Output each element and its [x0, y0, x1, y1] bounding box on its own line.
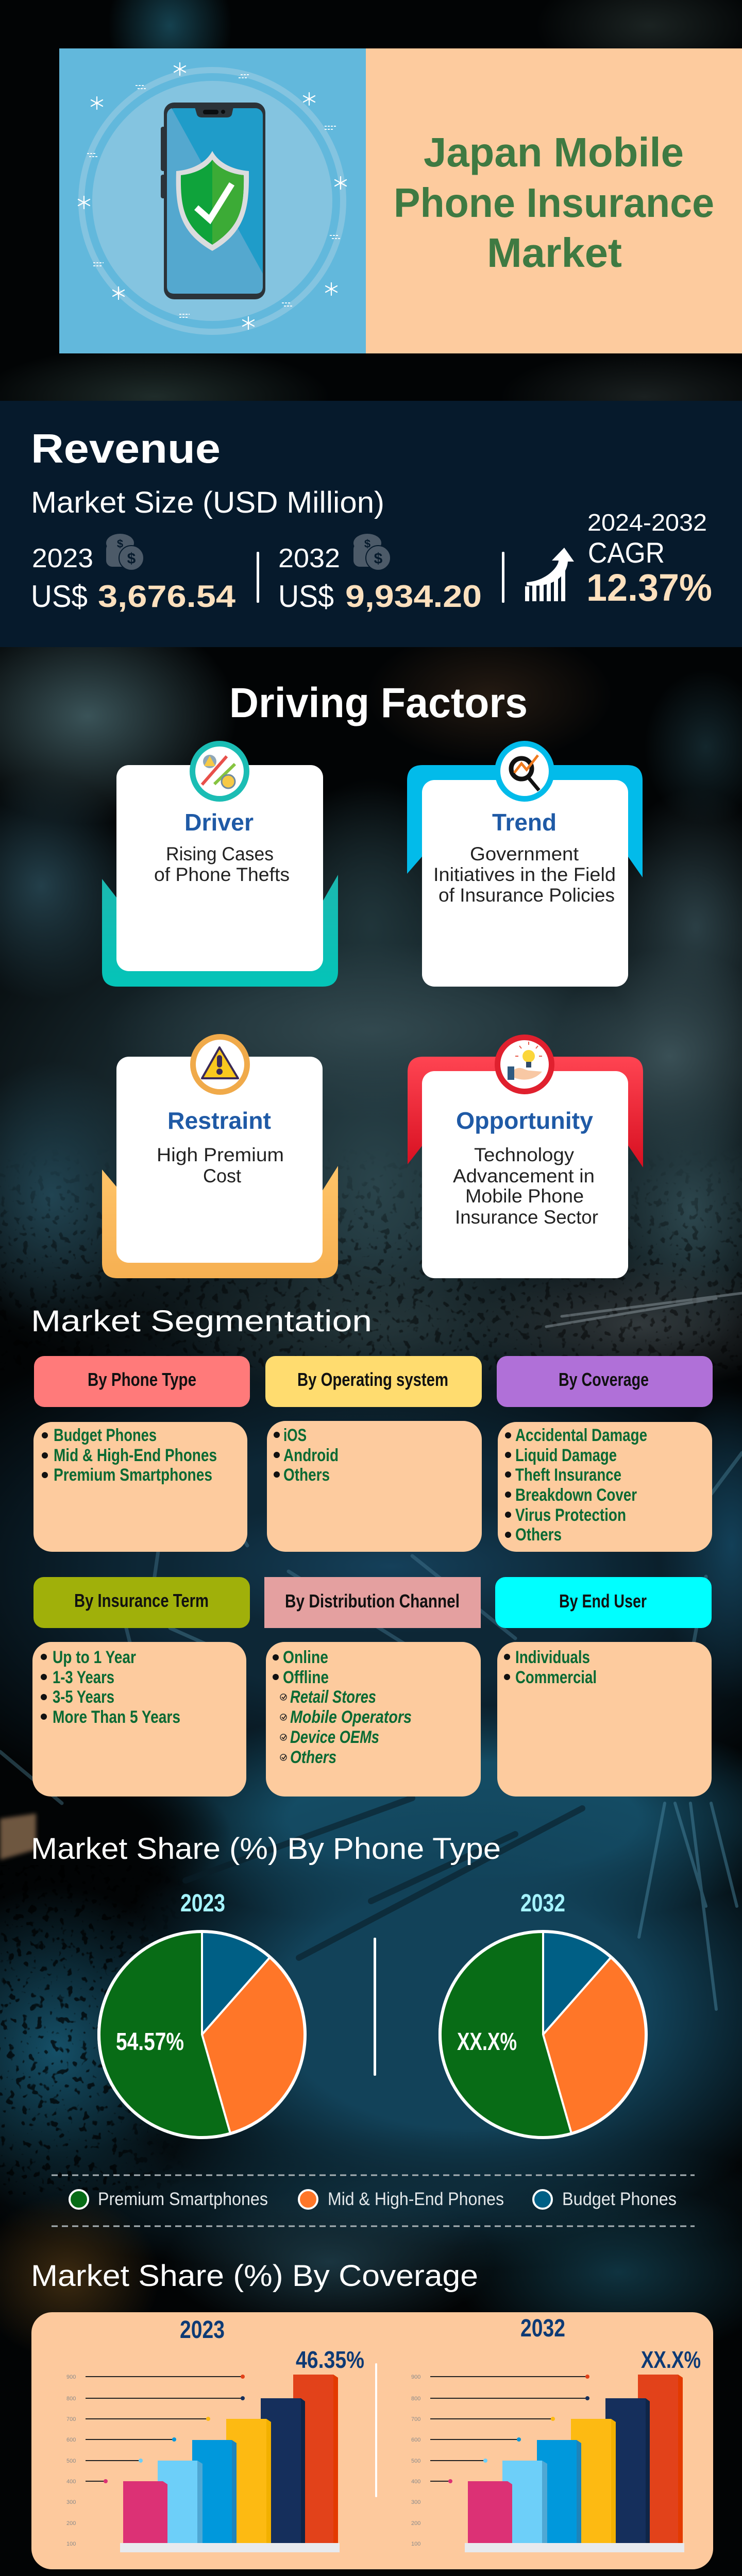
heading: market segmentation: Market Segmentation	[31, 1304, 372, 1338]
segment: by insurance term: By Insurance Term	[74, 1590, 209, 1611]
bar chart 2032: 900	[411, 2374, 420, 2380]
icon: sparkles	[78, 63, 346, 329]
icon: small dashes	[87, 75, 341, 317]
bar chart 2032: 300	[411, 2499, 420, 2505]
icon: trend	[495, 741, 554, 802]
stat: CAGR: 2024-2032	[587, 509, 707, 536]
list: end users	[504, 1648, 597, 1687]
bar chart 2023: 800	[66, 2396, 76, 2402]
list: coverage types: Theft Insurance	[515, 1465, 621, 1485]
title panel	[366, 48, 742, 353]
segment: by coverage: By Coverage	[559, 1369, 649, 1390]
list: distribution channels: Device OEMs	[290, 1727, 379, 1747]
list: phone types	[42, 1426, 217, 1485]
stat: CAGR: CAGR	[588, 536, 665, 569]
segment: by end user: By End User	[559, 1590, 647, 1612]
list: insurance terms: Up to 1 Year	[53, 1648, 136, 1667]
list: operating systems	[274, 1426, 339, 1485]
title panel: Market	[487, 230, 622, 276]
list: distribution channels: Retail Stores	[290, 1687, 376, 1707]
bar chart 2023	[66, 2316, 364, 2552]
segment: by distribution channel: By Distribution Channel	[285, 1590, 460, 1612]
list: end users: Individuals	[515, 1648, 590, 1667]
heading: market share by phone type: Market Share (%) By Phone Type	[31, 1832, 501, 1866]
segment: by phone type	[33, 1356, 250, 1552]
bar chart 2032: 600	[411, 2437, 420, 2443]
list: phone types: Premium Smartphones	[54, 1465, 212, 1485]
title panel: Phone Insurance	[394, 180, 714, 226]
legend: phone type: Mid & High-End Phones	[328, 2189, 504, 2209]
icon: coins 2032	[353, 534, 391, 570]
bar chart 2032: 700	[411, 2416, 420, 2422]
bar chart 2023: 600	[66, 2437, 76, 2443]
bar chart 2032	[411, 2315, 701, 2552]
card: trend: Trend	[492, 809, 556, 836]
stat: 2032: US$	[278, 579, 334, 614]
list: coverage types: Breakdown Cover	[515, 1485, 637, 1505]
bar chart 2023: 900	[66, 2374, 76, 2380]
segment: by distribution channel	[264, 1577, 481, 1797]
list: end users: Commercial	[515, 1668, 597, 1687]
trend text: Government	[470, 843, 579, 865]
icon: opportunity	[495, 1035, 554, 1094]
icon: growth chart arrow	[525, 548, 574, 601]
segment: by phone type: By Phone Type	[88, 1369, 196, 1390]
segment: by insurance term	[32, 1577, 250, 1797]
bar chart 2032: 400	[411, 2479, 420, 2485]
opportunity text: Insurance Sector	[455, 1207, 598, 1228]
list: insurance terms: 3-5 Years	[53, 1687, 114, 1707]
segment: by end user	[495, 1577, 712, 1797]
stat: CAGR: 12.37%	[586, 566, 712, 609]
revenue band	[0, 401, 742, 647]
bar chart 2023: 500	[66, 2458, 76, 2464]
icon: coins 2023: $	[117, 537, 123, 550]
bar chart 2023: 700	[66, 2416, 76, 2422]
list: insurance terms: More Than 5 Years	[53, 1707, 180, 1727]
legend: phone type: Premium Smartphones	[98, 2189, 268, 2209]
stat: 2023: 2023	[32, 544, 93, 573]
driver text: Rising Cases	[166, 843, 274, 865]
list: insurance terms: 1-3 Years	[53, 1668, 114, 1687]
heading: market share by coverage: Market Share (%) By Coverage	[31, 2259, 478, 2293]
segment: by operating system	[265, 1356, 482, 1552]
driver text: of Phone Thefts	[154, 864, 290, 885]
icon: driver	[190, 741, 249, 802]
restraint text	[157, 1144, 284, 1187]
bar chart 2023: 2023	[180, 2316, 225, 2344]
list: insurance terms	[41, 1648, 180, 1727]
trend text: Initiatives in the Field	[433, 864, 616, 885]
bar chart 2032: 2032	[520, 2315, 565, 2342]
opportunity text: Advancement in	[453, 1165, 595, 1187]
subheading: market size: Market Size (USD Million)	[31, 486, 384, 519]
driver text	[154, 843, 290, 885]
segment: by coverage	[497, 1356, 713, 1552]
bar chart 2023: 46.35%	[296, 2346, 364, 2373]
stat: 2032	[278, 534, 482, 614]
list: coverage types: Liquid Damage	[515, 1446, 617, 1465]
panel: coverage charts	[31, 2312, 713, 2569]
stat: 2032: 2032	[278, 544, 340, 573]
bar chart 2032: 200	[411, 2520, 420, 2527]
icon: smartphone with shield	[161, 103, 265, 299]
list: coverage types: Virus Protection	[515, 1505, 626, 1525]
heading: revenue: Revenue	[31, 426, 221, 471]
bar chart 2023: 200	[66, 2520, 76, 2527]
pie chart 2023: 2023	[180, 1890, 225, 1917]
opportunity text: Mobile Phone	[465, 1185, 584, 1207]
card: opportunity: Opportunity	[456, 1107, 593, 1134]
bar chart 2032: 500	[411, 2458, 420, 2464]
list: distribution channels: Offline	[283, 1668, 329, 1687]
hero banner	[59, 48, 742, 353]
list: operating systems: Others	[283, 1465, 330, 1485]
stat: CAGR	[586, 509, 712, 609]
stat: 2032: 9,934.20	[345, 579, 482, 614]
list: phone types: Mid & High-End Phones	[54, 1446, 217, 1465]
list: distribution channels: Online	[283, 1648, 328, 1667]
stat: 2023: 3,676.54	[98, 579, 236, 614]
pie chart 2032	[440, 1890, 646, 2138]
list: coverage types	[505, 1426, 647, 1545]
legend: phone type: Budget Phones	[562, 2189, 677, 2209]
list: coverage types: Accidental Damage	[515, 1426, 647, 1445]
title panel: Japan Mobile	[424, 129, 684, 175]
bar chart 2023: 400	[66, 2479, 76, 2485]
list: operating systems: Android	[283, 1446, 339, 1465]
trend text	[433, 843, 616, 906]
icon: coins 2032: $	[364, 537, 370, 550]
heading: driving factors: Driving Factors	[229, 680, 528, 726]
opportunity text: Technology	[474, 1144, 575, 1165]
bar chart 2023: 100	[66, 2541, 76, 2547]
card: driver: Driver	[184, 809, 254, 836]
opportunity text	[453, 1144, 598, 1228]
pie chart 2032: 2032	[520, 1890, 565, 1917]
bar chart 2032: 800	[411, 2396, 420, 2402]
restraint text: Cost	[203, 1165, 242, 1187]
bar chart 2032: 100	[411, 2541, 420, 2547]
legend: phone type	[70, 2189, 677, 2209]
card: driver	[102, 741, 338, 987]
card: restraint: Restraint	[167, 1107, 271, 1134]
restraint text: High Premium	[157, 1144, 284, 1165]
list: operating systems: iOS	[283, 1426, 307, 1445]
card: opportunity	[408, 1035, 643, 1278]
bar chart 2032: XX.X%	[641, 2346, 701, 2373]
icon: coins 2023	[106, 534, 144, 570]
list: coverage types: Others	[515, 1525, 562, 1545]
card: restraint	[102, 1034, 338, 1278]
card: trend	[407, 741, 643, 987]
pie chart 2032: XX.X%	[457, 2028, 517, 2056]
segment: by operating system: By Operating system	[297, 1369, 448, 1390]
icon: warning	[190, 1034, 250, 1095]
list: distribution channels: Mobile Operators	[290, 1707, 412, 1727]
trend text: of Insurance Policies	[439, 885, 615, 906]
background debris and cracks	[0, 1149, 742, 2576]
list: phone types: Budget Phones	[54, 1426, 157, 1445]
pie chart 2023: 54.57%	[116, 2028, 184, 2056]
list: distribution channels	[273, 1648, 412, 1767]
stat: 2023	[31, 534, 236, 614]
bar chart 2023: 300	[66, 2499, 76, 2505]
hero illustration panel	[59, 48, 366, 353]
pie chart 2023	[98, 1890, 305, 2138]
icon: coins 2023: $	[127, 550, 136, 567]
stat: 2023: US$	[31, 579, 88, 614]
list: distribution channels: Others	[290, 1748, 336, 1767]
icon: coins 2032: $	[374, 550, 383, 567]
